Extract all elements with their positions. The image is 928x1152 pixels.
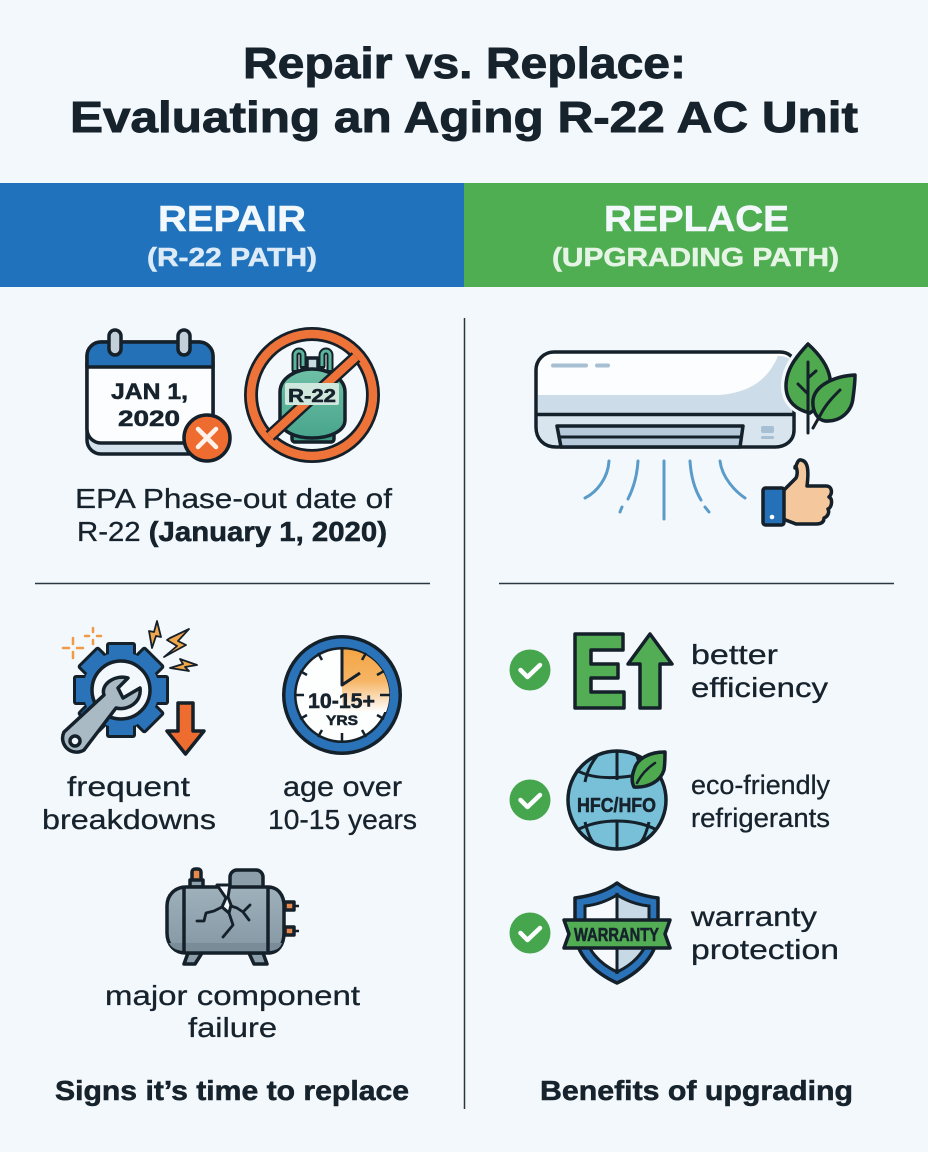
text: EPA phase-out date: EPA Phase-out date of [75,483,392,514]
benefit: eco-friendly refrigerants: eco-friendly [691,770,830,800]
caption: signs it's time to replace: Signs it’s time to replace [55,1075,409,1106]
text: EPA phase-out date: R-22 (January 1, 2020) [77,516,387,547]
icon: AC unit with leaf and thumbs up [536,344,855,525]
icon: gear and wrench with down arrow [63,621,204,754]
check badge [510,780,550,820]
air conditioner body [536,352,794,447]
text: age over 10-15 years: 10-15 years [268,804,417,835]
header: replace path: (UPGRADING PATH) [552,242,839,272]
text: EPA phase-out date [75,483,392,547]
icon: E with up arrow [575,634,672,708]
wrench [63,677,140,752]
title [70,39,858,142]
caption: benefits of upgrading: Benefits of upgrading [540,1075,853,1106]
text: major component failure: major component [105,980,360,1011]
lightning bolts [149,621,197,671]
text: age over 10-15 years [268,771,417,835]
icon: prohibited R-22 cylinder: R-22 [288,385,336,406]
icon: calendar with phase-out date: JAN 1, [111,379,188,404]
gear [73,642,169,738]
icon: prohibited R-22 cylinder [251,334,373,456]
text: frequent breakdowns: breakdowns [42,804,216,835]
header: repair path: REPAIR [158,198,306,239]
header: repair path [0,183,464,287]
icon: calendar with phase-out date [87,330,230,461]
title: Repair vs. Replace: [243,39,686,88]
title: Evaluating an Aging R-22 AC Unit [70,93,858,142]
sparkles [63,628,101,658]
check badge [510,912,550,954]
text: major component failure: failure [188,1012,277,1043]
benefit: better efficiency [510,634,828,708]
air flow lines [585,461,745,519]
benefit: warranty protection [510,883,839,983]
text: frequent breakdowns [42,771,216,835]
text: frequent breakdowns: frequent [67,771,190,802]
header: repair path: (R-22 PATH) [147,242,317,272]
header: replace path: REPLACE [604,198,789,239]
leaves [786,344,855,433]
benefit: warranty protection: warranty [690,901,817,932]
icon: globe with leaf [568,751,666,849]
icon: warranty shield [564,883,670,983]
icon: calendar with phase-out date: 2020 [118,406,180,431]
benefit: eco-friendly refrigerants: refrigerants [691,803,830,833]
icon: warranty shield: WARRANTY [574,925,659,945]
benefit: better efficiency: better [691,639,778,670]
icon: globe with leaf: HFC/HFO [577,795,656,817]
icon: clock 10-15+ years: 10-15+ [308,689,375,713]
check badge [510,650,550,690]
down arrow [167,703,204,754]
thumbs up [763,460,832,525]
icon: clock 10-15+ years: YRS [326,712,358,728]
benefit: eco-friendly refrigerants [510,751,830,849]
benefit: better efficiency: efficiency [691,672,828,703]
text: major component failure [105,980,360,1043]
icon: clock 10-15+ years [282,635,402,755]
icon: cracked compressor [167,869,299,964]
text: age over 10-15 years: age over [283,771,402,802]
benefit: warranty protection: protection [691,934,839,965]
header: replace path [464,183,928,287]
